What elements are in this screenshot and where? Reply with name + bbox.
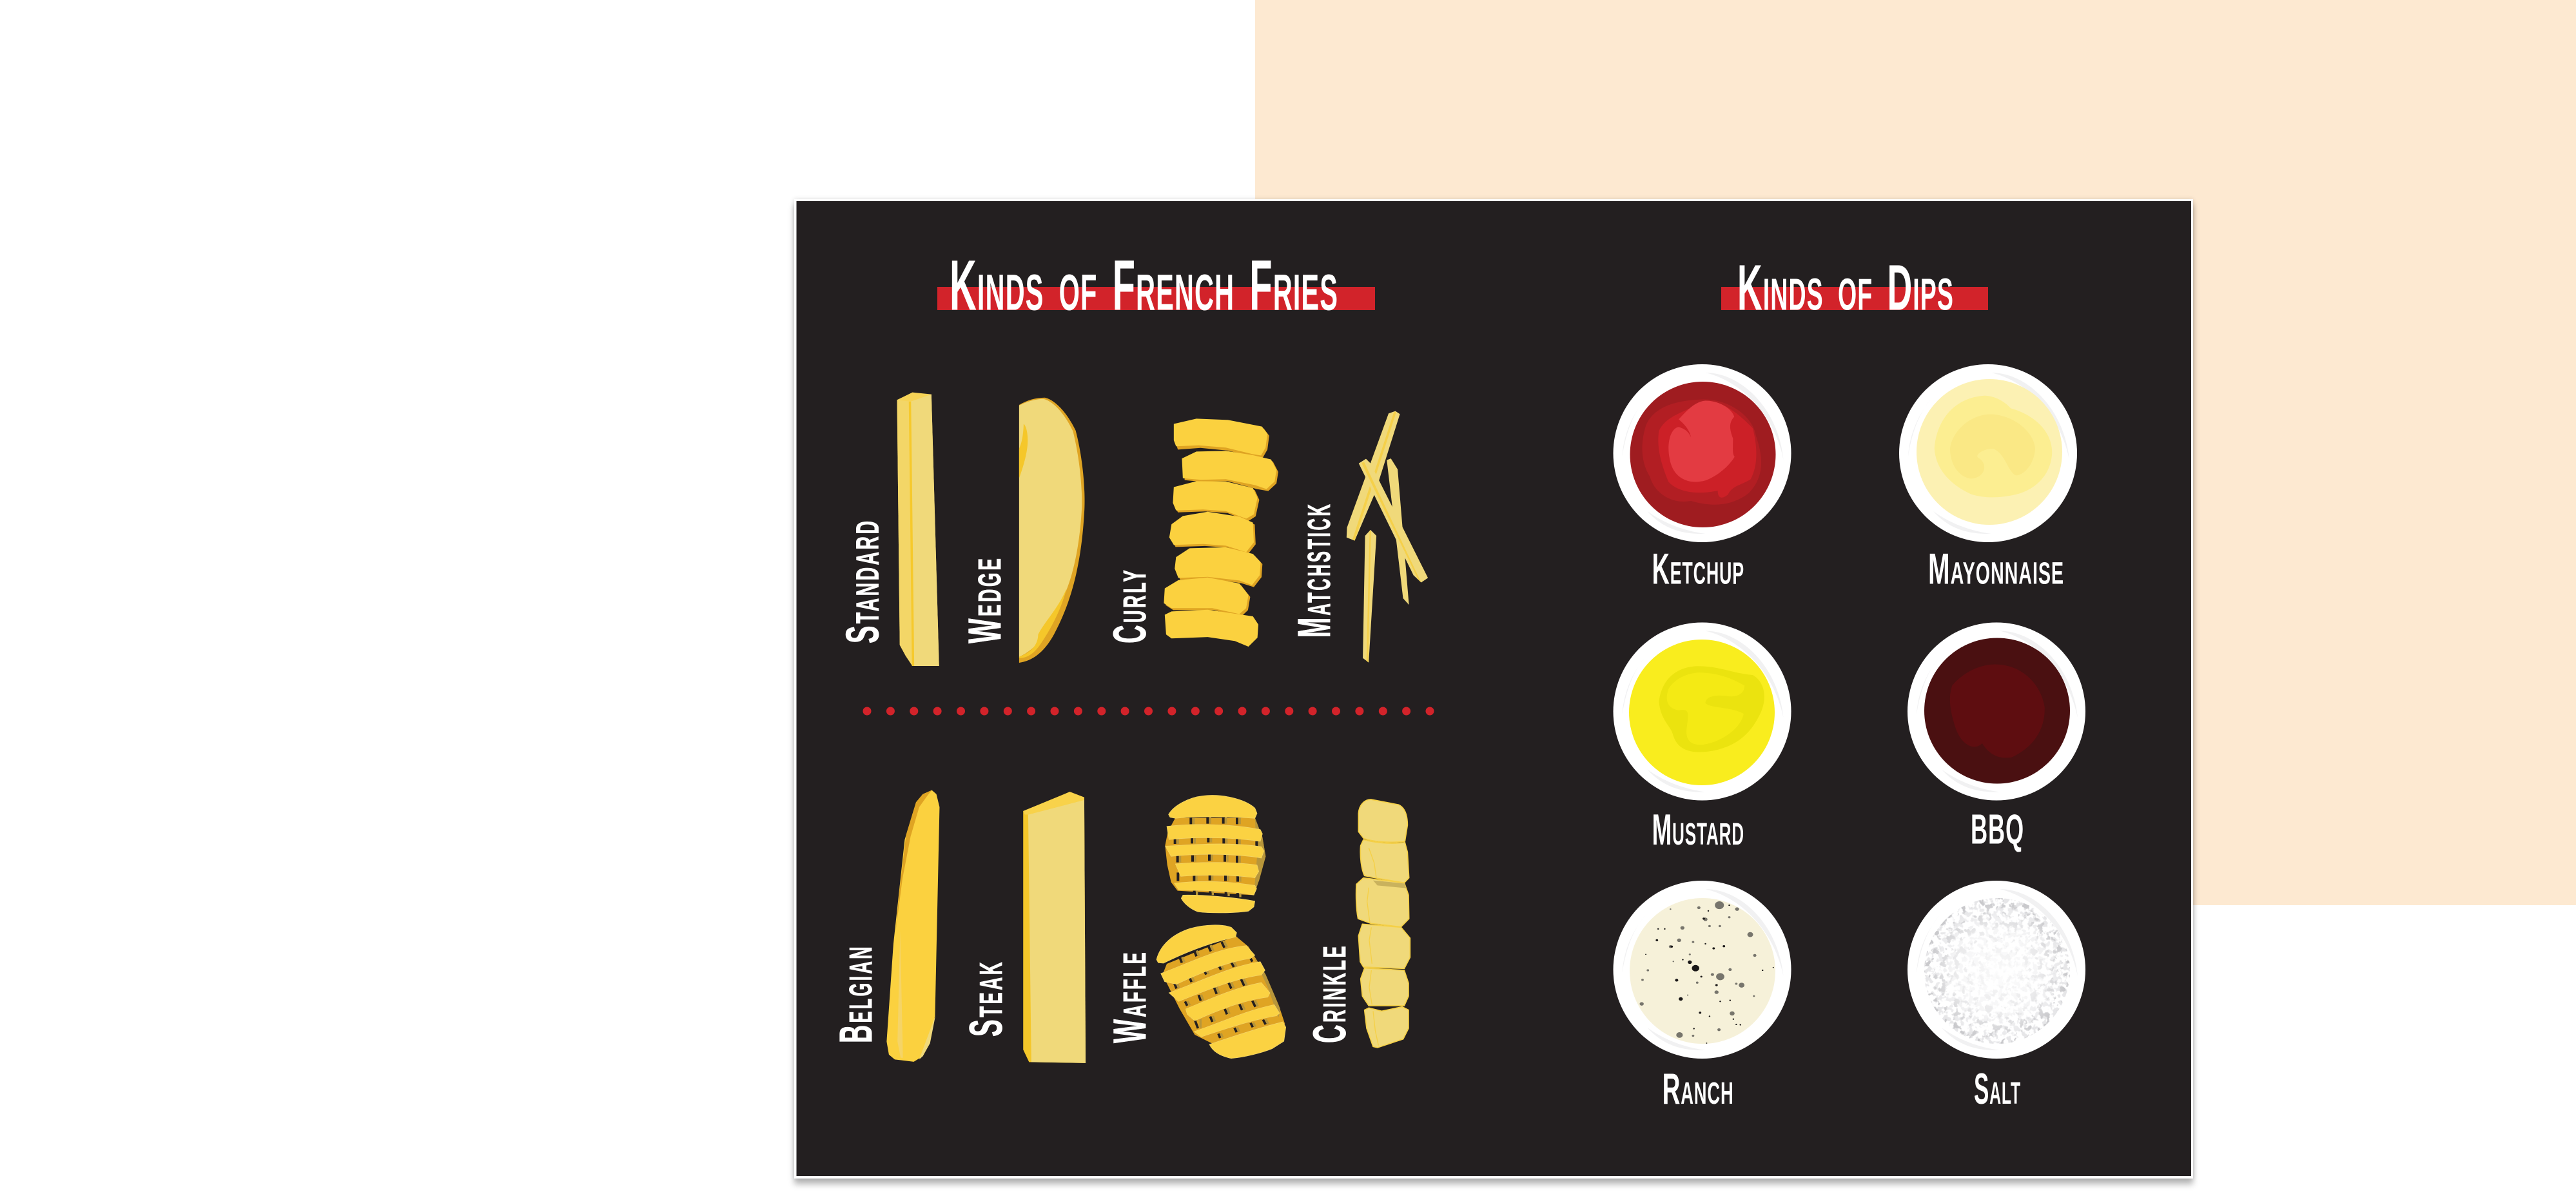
dip: ketchup bowl [1613, 364, 1791, 542]
dip: mustard bowl [1613, 623, 1791, 801]
dark panel background [797, 201, 2191, 1176]
fries top row [897, 393, 1428, 666]
label: Mustard: MUSTARD [1652, 806, 1744, 854]
fries bottom row: waffle and crinkle [1156, 796, 1410, 1059]
label: Belgian: BELGIAN [831, 944, 882, 1043]
fry: waffle lower [1156, 925, 1286, 1059]
dip: ranch bowl [1613, 881, 1791, 1059]
label: Standard: STANDARD [838, 518, 889, 643]
label: BBQ: BBQ [1971, 806, 2024, 852]
label: Waffle: WAFFLE [1105, 950, 1156, 1043]
heading: Kinds of Dips: KINDS OF DIPS [1737, 251, 1954, 324]
heading: Kinds of French Fries: KINDS OF FRENCH FRIES [950, 246, 1338, 325]
fry: matchstick [1347, 411, 1428, 662]
dip: mayonnaise bowl [1899, 364, 2077, 542]
dip: salt bowl [1908, 881, 2085, 1059]
label: Steak: STEAK [961, 960, 1012, 1037]
label: Salt: SALT [1974, 1065, 2021, 1113]
dotted divider [863, 707, 1434, 716]
label: Mayonnaise: MAYONNAISE [1928, 545, 2064, 593]
fries bottom row: belgian and steak [886, 790, 1086, 1063]
fry: steak [1023, 792, 1086, 1063]
label: Ketchup: KETCHUP [1652, 545, 1744, 593]
fry: standard [897, 393, 939, 666]
fry: waffle upper [1165, 796, 1265, 913]
dip: BBQ bowl [1908, 623, 2085, 801]
fry: belgian [886, 790, 939, 1062]
label: Ranch: RANCH [1663, 1065, 1734, 1113]
infographic panel: fries and dips [797, 201, 2191, 1176]
fry: crinkle [1356, 799, 1410, 1048]
fry: curly [1164, 418, 1278, 647]
fry: wedge [1019, 398, 1085, 663]
background beige block [1255, 0, 2576, 905]
label: Crinkle: CRINKLE [1305, 944, 1356, 1043]
label: Wedge: WEDGE [960, 556, 1011, 643]
panel backing with white border and shadow [794, 199, 2193, 1179]
label: Matchstick: MATCHSTICK [1289, 502, 1340, 638]
label: Curly: CURLY [1105, 568, 1156, 643]
